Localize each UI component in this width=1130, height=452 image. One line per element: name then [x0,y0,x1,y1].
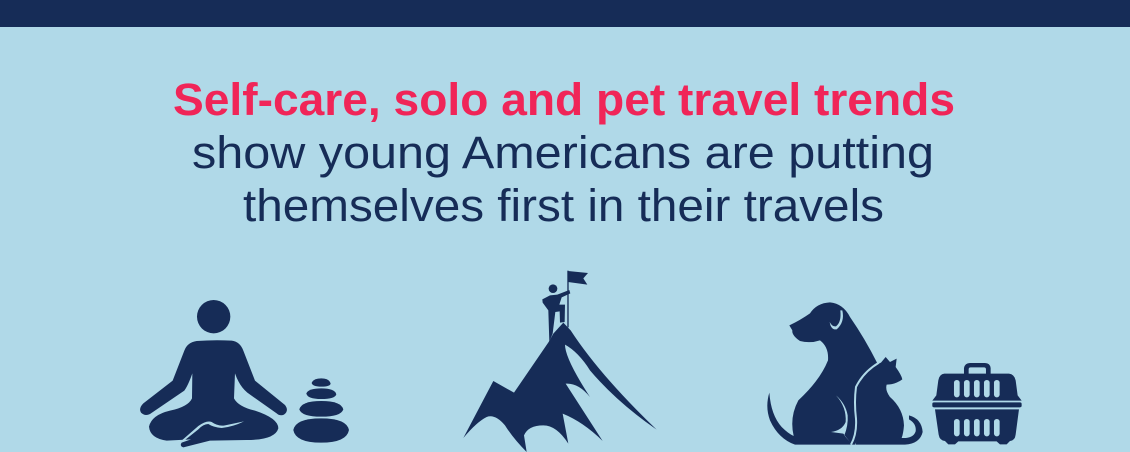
icon: dog, cat and pet carrier [767,302,1022,445]
separating line between dog and cat [851,363,879,445]
icon: climber with flag on mountain peak [463,271,657,452]
icon: meditating person with stacked stones [140,300,349,447]
carrier vents [954,380,1000,436]
dog haunch line [831,395,850,442]
header bar [0,0,1130,27]
carrier bottom [935,409,1019,444]
cat [856,357,923,445]
person body [140,340,287,447]
crossed leg highlight [180,421,244,442]
carrier rim [932,402,1022,407]
carrier top [932,374,1022,401]
carrier handle [964,363,991,375]
dog [767,302,882,445]
stone stack [293,378,349,443]
mountain [463,323,657,452]
title [173,74,955,231]
flag [568,271,588,285]
dog ear outline [830,310,843,329]
headline in pink: Self-care, solo and pet travel trends [173,74,955,125]
flagpole [567,271,569,327]
subtitle line one: show young Americans are putting [192,127,934,178]
person head [197,300,230,333]
subtitle line two: themselves first in their travels [243,180,884,231]
climber [542,284,570,341]
